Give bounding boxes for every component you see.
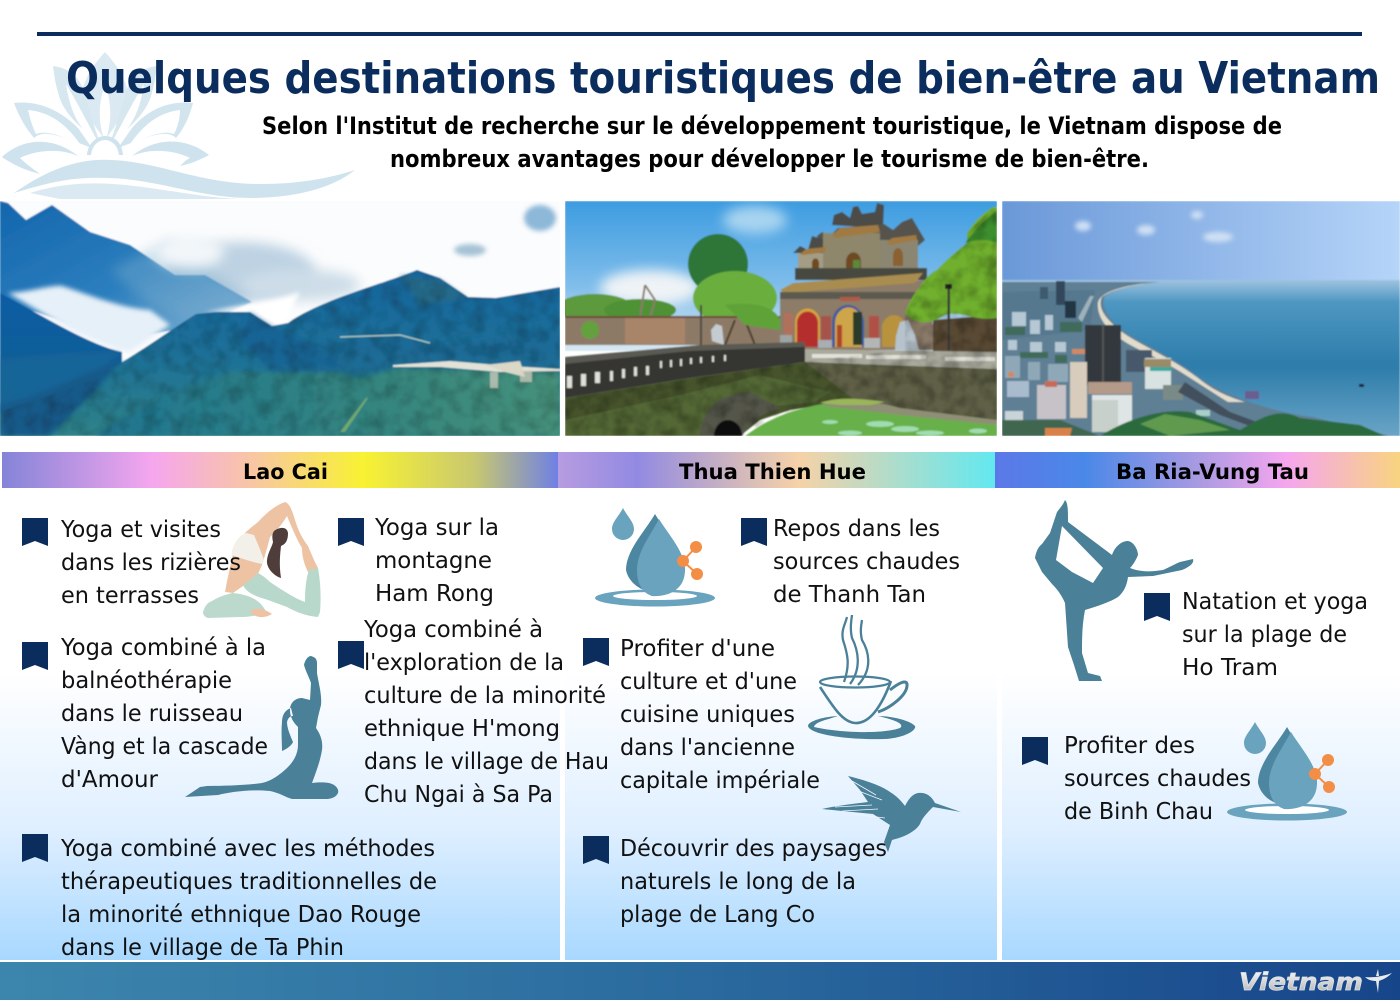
logo: Vietnam+: Vietnam [1239, 968, 1363, 996]
icon: coloured yoga woman [203, 502, 321, 618]
top rule [37, 32, 1362, 36]
item: Thanh Tan hot springs: de Thanh Tan [773, 580, 926, 608]
heading bar: Thua Thien Hue [558, 452, 995, 488]
icon: coffee cup [808, 615, 915, 739]
item: Lang Co beach: naturels le long de la [620, 867, 856, 895]
gate lower body [780, 280, 937, 350]
subtitle: Selon l'Institut de recherche sur le développement touristique, le Vietnam dispose de [262, 112, 1282, 140]
bridge [565, 344, 805, 398]
photo: Vung Tau coast [1002, 201, 1400, 436]
item: Vang stream balneotherapy: d'Amour [61, 765, 158, 793]
item: Binh Chau hot springs: sources chaudes [1064, 764, 1251, 792]
item: rice terraces [22, 515, 241, 609]
panel: Ba Ria-Vung Tau background [1002, 436, 1400, 960]
item: Ho Tram beach [1144, 587, 1368, 681]
item: imperial capital culture: Profiter d'une [620, 634, 775, 662]
photo: Hue imperial gate [557, 201, 997, 436]
item: imperial capital culture: dans l'ancienne [620, 733, 795, 761]
item: Ho Tram beach: Natation et yoga [1182, 587, 1368, 615]
item: rice terraces: Yoga et visites [60, 515, 221, 543]
item: Vang stream balneotherapy: Yoga combiné à la [60, 633, 266, 661]
heading bar: Ba Ria-Vung Tau: Ba Ria-Vung Tau [1116, 460, 1309, 485]
item: Ham Rong mountain: montagne [375, 546, 492, 574]
item: H'mong culture [338, 615, 609, 808]
item: Lang Co beach: Découvrir des paysages [620, 834, 887, 862]
item: rice terraces: dans les rizières [61, 548, 241, 576]
item: Ham Rong mountain: Yoga sur la [374, 513, 499, 541]
heading bar: Lao Cai [2, 452, 558, 488]
icon: hummingbird [822, 776, 961, 852]
item: Lang Co beach [583, 834, 887, 928]
footer band [0, 962, 1400, 1000]
item: Lang Co beach: plage de Lang Co [620, 900, 815, 928]
item: H'mong culture: l'exploration de la [364, 648, 564, 676]
item: Vang stream balneotherapy: Vàng et la cascade [61, 732, 268, 760]
item: Dao Rouge therapies: la minorité ethnique Dao Rouge [61, 900, 421, 928]
item: imperial capital culture [583, 634, 820, 794]
right tree [933, 315, 997, 352]
item: H'mong culture: Yoga combiné à [363, 615, 543, 643]
icon: silhouette of woman in cobra pose [185, 656, 338, 799]
item: Dao Rouge therapies: thérapeutiques traditionnelles de [61, 867, 437, 895]
item: Thanh Tan hot springs: sources chaudes [773, 547, 960, 575]
item: H'mong culture: ethnique H'mong [364, 714, 560, 742]
item: Binh Chau hot springs [1022, 731, 1251, 825]
icon: dancer pose silhouette [1035, 500, 1193, 681]
item: H'mong culture: dans le village de Hau [364, 747, 609, 775]
item: Binh Chau hot springs: Profiter des [1064, 731, 1195, 759]
subtitle: nombreux avantages pour développer le tourisme de bien-être. [390, 145, 1149, 173]
heading bar: Thua Thien Hue: Thua Thien Hue [679, 460, 866, 485]
lotus watermark [2, 52, 355, 199]
item: Thanh Tan hot springs [741, 514, 960, 608]
item: Vang stream balneotherapy: balnéothérapie [61, 666, 232, 694]
item: Binh Chau hot springs: de Binh Chau [1064, 797, 1213, 825]
item: Dao Rouge therapies: dans le village de Ta Phin [61, 933, 344, 961]
item: imperial capital culture: culture et d'une [620, 667, 797, 695]
item: Dao Rouge therapies: Yoga combiné avec les méthodes [60, 834, 435, 862]
photo: Lao Cai mountains [0, 201, 560, 436]
panel: Thua Thien Hue background [565, 436, 997, 960]
heading bar: Ba Ria-Vung Tau [995, 452, 1400, 488]
heading bar: Lao Cai: Lao Cai [243, 460, 328, 485]
item: rice terraces: en terrasses [61, 581, 199, 609]
item: Ho Tram beach: Ho Tram [1182, 653, 1278, 681]
item: imperial capital culture: cuisine uniques [620, 700, 795, 728]
subtitle [262, 112, 1282, 173]
item: H'mong culture: culture de la minorité [364, 681, 606, 709]
item: Vang stream balneotherapy: dans le ruisseau [61, 699, 243, 727]
item: Ham Rong mountain: Ham Rong [375, 579, 494, 607]
item: Thanh Tan hot springs: Repos dans les [773, 514, 940, 542]
item: Dao Rouge therapies [22, 834, 437, 961]
icon: water drop with molecule [595, 508, 715, 606]
item: Vang stream balneotherapy [22, 633, 268, 793]
item: imperial capital culture: capitale impériale [620, 766, 820, 794]
item: Ham Rong mountain [338, 513, 499, 607]
icon: water drop with molecule (right) [1227, 722, 1347, 820]
panel: Lao Cai background [0, 436, 560, 960]
item: Ho Tram beach: sur la plage de [1182, 620, 1347, 648]
item: H'mong culture: Chu Ngai à Sa Pa [364, 780, 553, 808]
gate upper crest [832, 203, 884, 228]
